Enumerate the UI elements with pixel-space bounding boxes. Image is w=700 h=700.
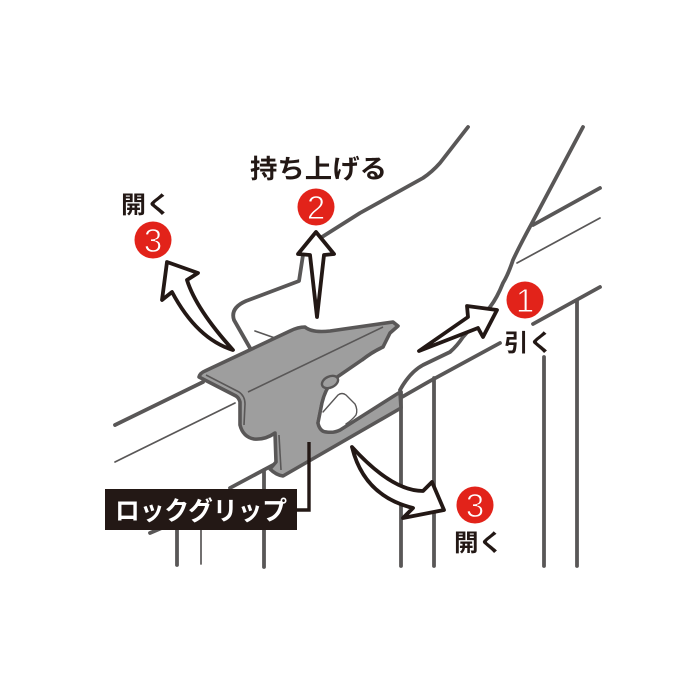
knuckle — [320, 373, 340, 391]
label: lock grip — [105, 489, 297, 530]
arrow: lift up — [298, 232, 334, 317]
step 2 label: 持ち上げる — [250, 154, 387, 184]
gate frame lines — [115, 188, 600, 567]
contour over thumb area — [318, 347, 400, 432]
step 1 badge — [506, 282, 544, 319]
step 2 badge: 2 — [307, 189, 325, 226]
step 1 badge: 1 — [516, 282, 534, 319]
left hand outline — [233, 127, 468, 348]
leader line — [296, 442, 309, 510]
thumb area — [318, 360, 400, 432]
right hand outline — [400, 127, 583, 390]
step 3 left label: 開く — [121, 192, 171, 219]
lock grip — [199, 322, 401, 476]
step 3 right badge: 3 — [466, 487, 484, 524]
step 3 right badge — [456, 486, 494, 524]
arrow: open lower right — [352, 447, 444, 518]
step 1 label: 引く — [504, 330, 553, 357]
step 2 badge — [298, 188, 334, 226]
step 3 left badge — [134, 222, 172, 259]
step 3 left badge: 3 — [144, 222, 162, 259]
arrow: open left — [162, 262, 233, 350]
arrow: pull — [419, 306, 497, 351]
step 3 right label: 開く — [454, 530, 503, 557]
label: lock grip: ロックグリップ — [115, 496, 287, 526]
thumb nail — [323, 394, 357, 424]
